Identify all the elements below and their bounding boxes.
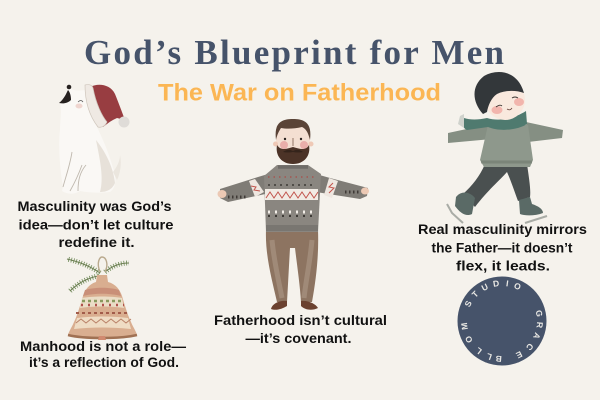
text: real masculinity mirrors: flex, it leads. <box>456 258 550 274</box>
text: manhood is not a role: Manhood is not a role— <box>20 339 187 354</box>
badge: Grace Blom Studio: D <box>492 278 500 289</box>
text: masculinity was God's idea: Masculinity was God’s <box>18 199 172 214</box>
illustration: boy ice skating <box>447 72 563 223</box>
text: masculinity was God's idea: idea—don’t let culture <box>18 218 174 232</box>
badge: Grace Blom Studio: C <box>524 341 536 353</box>
badge: Grace Blom Studio: B <box>495 354 502 364</box>
hair <box>474 72 524 114</box>
text: real masculinity mirrors: Real masculinity mirrors <box>418 222 587 237</box>
badge: Grace Blom Studio: R <box>534 321 545 329</box>
badge: Grace Blom Studio: M <box>459 322 470 330</box>
sweater torso <box>480 125 533 167</box>
illustration: bearded man in sweater <box>218 119 369 310</box>
text: manhood is not a role: it’s a reflection of God. <box>29 355 179 370</box>
beard <box>277 145 309 164</box>
icon: white dog with santa hat <box>59 85 130 194</box>
icon: christmas bell <box>67 257 137 340</box>
badge: Grace Blom Studio: G <box>534 309 545 318</box>
badge: Grace Blom Studio: O <box>512 280 523 292</box>
badge: Grace Blom Studio: U <box>480 281 490 293</box>
shoes <box>271 301 287 310</box>
sweater arms <box>448 124 492 143</box>
text: masculinity was God's idea <box>18 199 174 250</box>
santa hat <box>90 85 125 127</box>
badge: Grace Blom Studio: I <box>505 278 509 288</box>
hair <box>276 119 310 140</box>
legs <box>463 164 530 207</box>
text: fatherhood isn't cultural <box>214 313 387 346</box>
face <box>485 80 525 120</box>
text: manhood is not a role <box>20 339 187 370</box>
hands <box>218 190 226 198</box>
text: fatherhood isn't cultural: —it’s covenant. <box>246 331 352 346</box>
badge: Grace Blom Studio: L <box>473 345 484 356</box>
text: masculinity was God's idea: redefine it. <box>58 235 134 250</box>
sweater torso <box>264 165 321 232</box>
scarf <box>463 111 527 130</box>
skate boots <box>455 193 475 215</box>
badge: Grace Blom Studio: S <box>462 299 474 309</box>
badge: Grace Blom Studio: L <box>485 351 493 362</box>
badge: Grace Blom Studio: A <box>531 331 543 341</box>
text: real masculinity mirrors <box>418 222 587 274</box>
text: real masculinity mirrors: the Father—it doesn’t <box>432 240 573 256</box>
trousers <box>266 230 318 302</box>
badge: Grace Blom Studio: T <box>470 288 481 300</box>
text: fatherhood isn't cultural: Fatherhood isn’t cultural <box>214 313 387 328</box>
head <box>276 119 310 161</box>
subtitle: The War on Fatherhood <box>158 80 441 106</box>
dog open mouth <box>59 90 71 103</box>
title: God’s Blueprint for Men <box>84 33 504 72</box>
badge: Grace Blom Studio <box>458 276 546 366</box>
badge: Grace Blom Studio: E <box>514 349 524 361</box>
sweater arms <box>220 174 270 202</box>
badge: Grace Blom Studio: O <box>463 334 475 345</box>
